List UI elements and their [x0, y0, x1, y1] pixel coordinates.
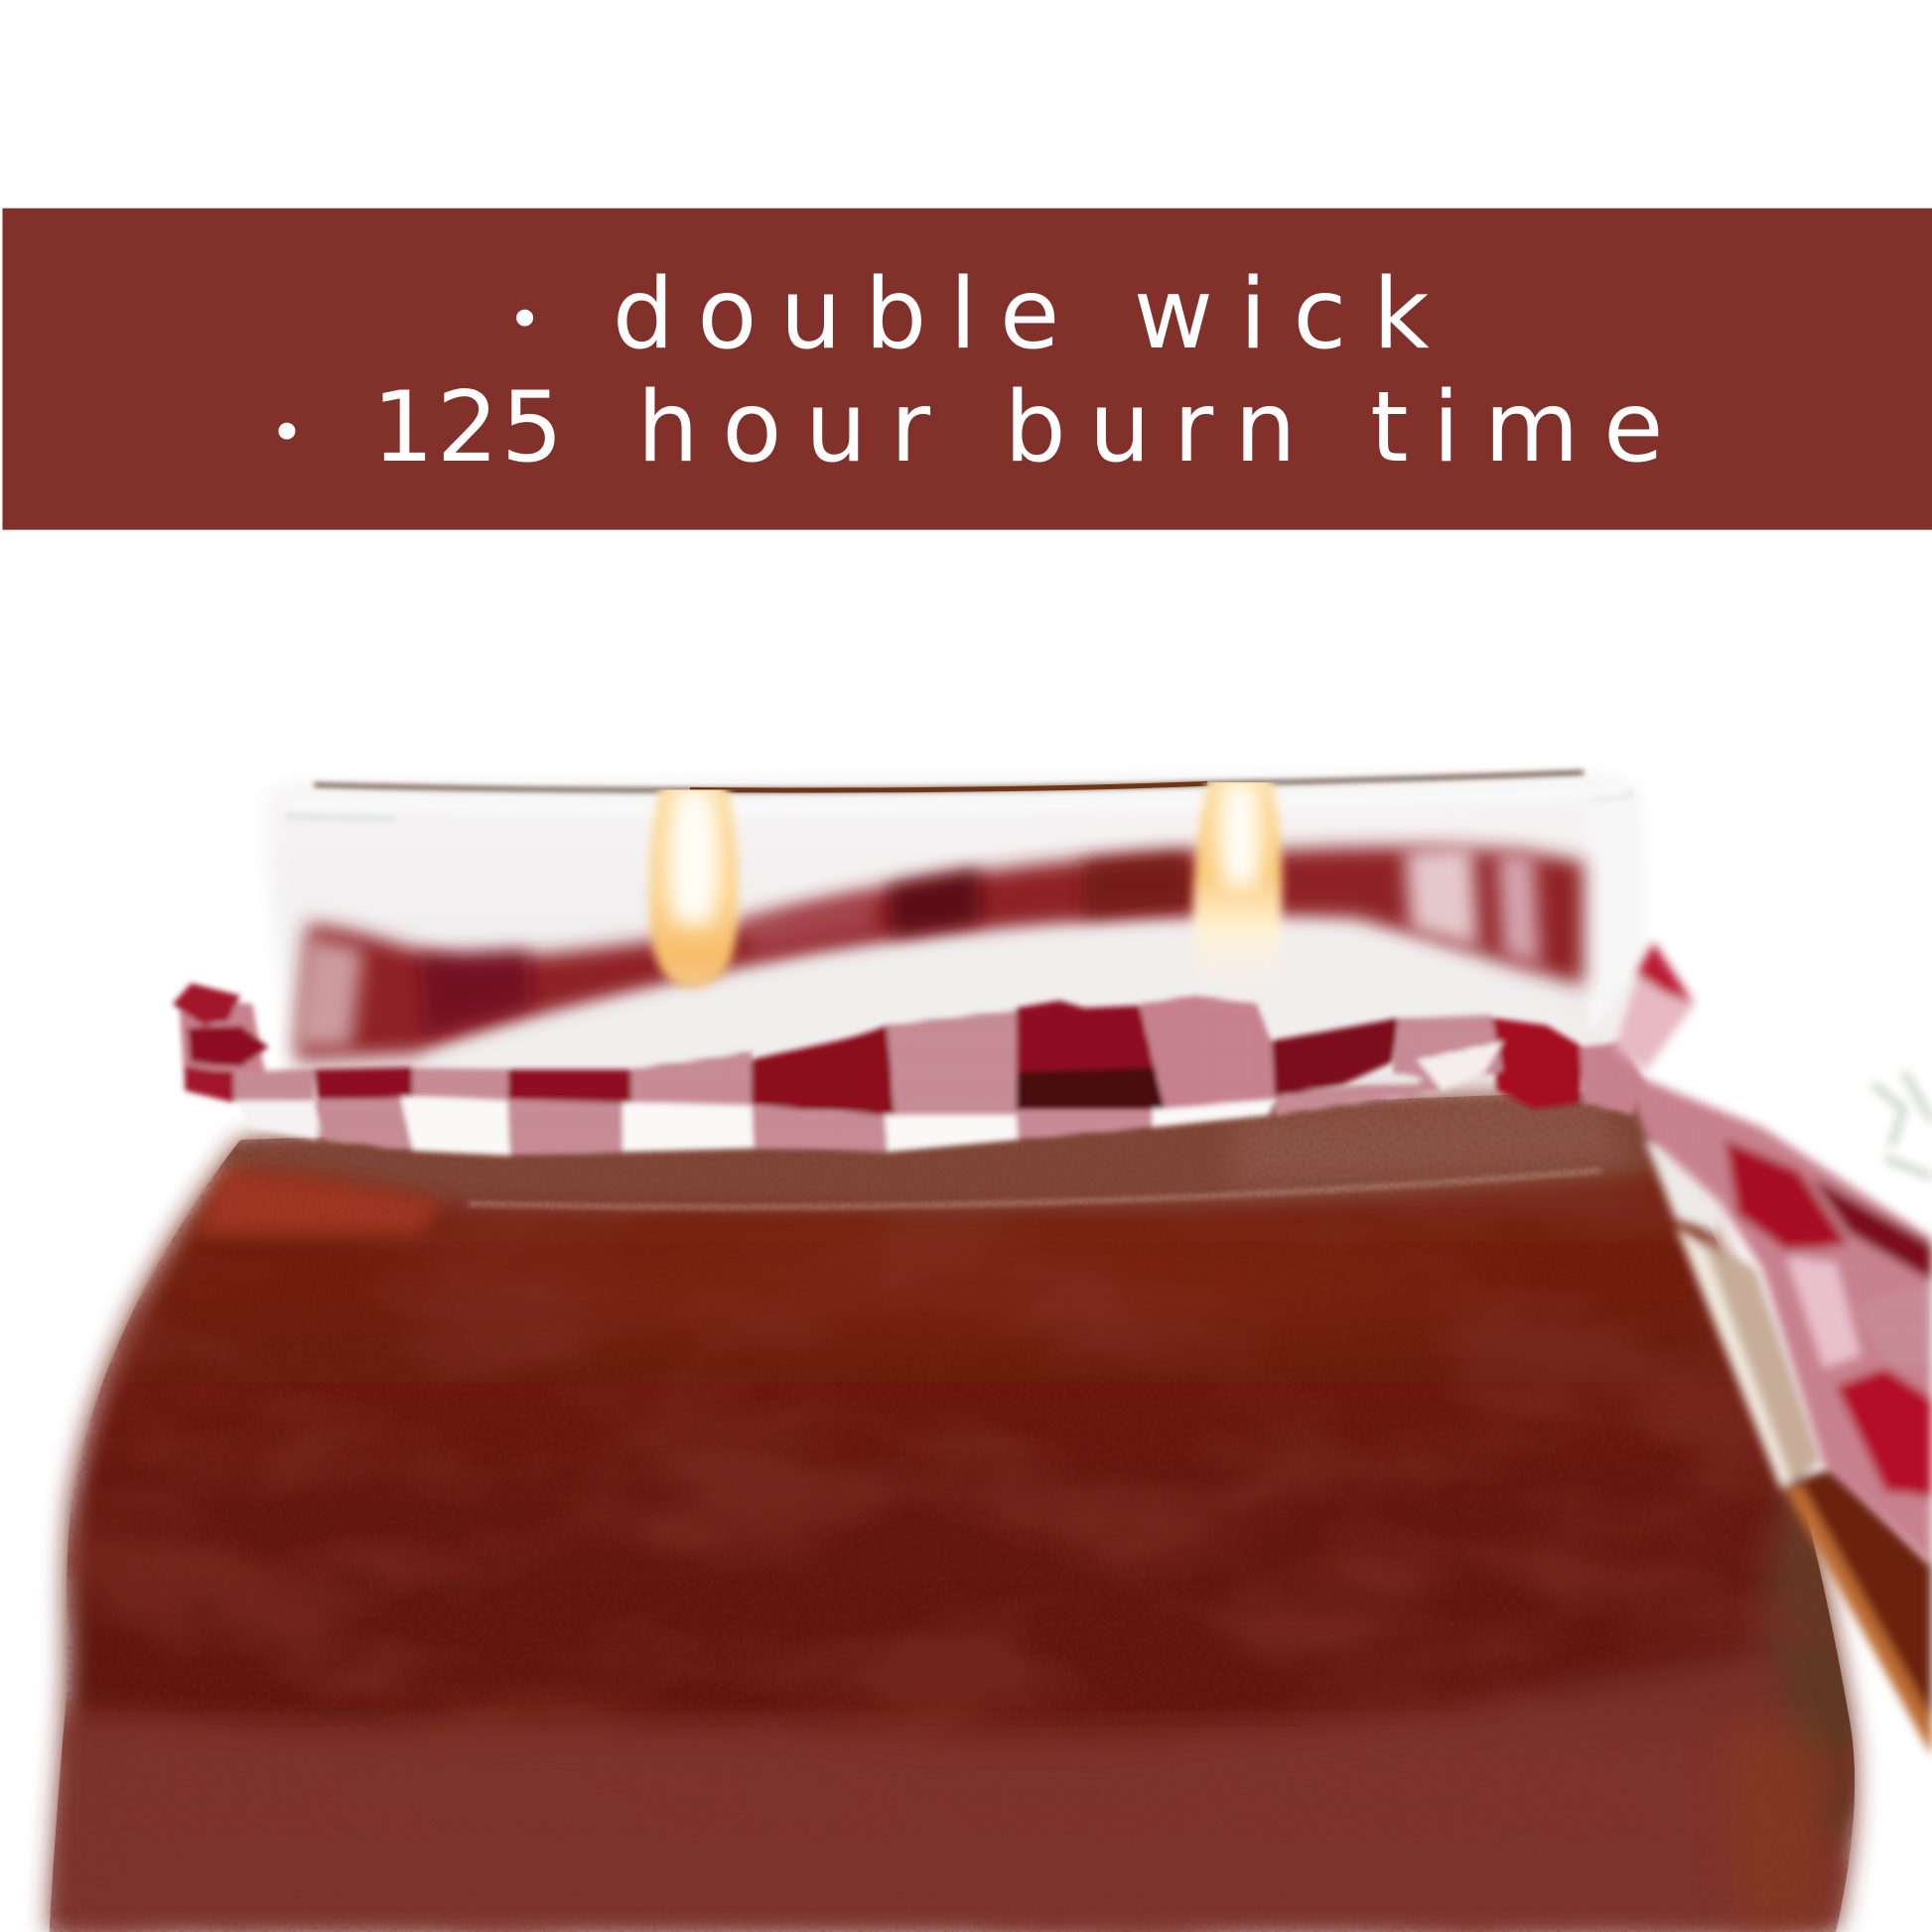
feature: 125 hour burn time: • — [270, 398, 304, 466]
feature: 125 hour burn time: burn — [1004, 371, 1297, 484]
right flame — [1192, 770, 1283, 1004]
paper tag — [1645, 1140, 1932, 1756]
gingham ribbon tied around neck — [173, 983, 1645, 1156]
bottom row white cells — [234, 1097, 1276, 1156]
ribbon tail — [1626, 1072, 1932, 1565]
top row check cells — [234, 996, 1503, 1115]
rim of jar — [283, 772, 1626, 808]
top row red cells — [314, 1001, 1584, 1115]
glass jar neck — [268, 773, 1641, 1109]
left ribbon end — [173, 983, 269, 1103]
feature: 125 hour burn time: 125 — [372, 371, 563, 484]
feature: 125 hour burn time: hour — [637, 371, 931, 484]
wax surface — [419, 926, 1589, 1084]
feature: 125 hour burn time: time — [1370, 371, 1663, 484]
green sprig — [1872, 1072, 1932, 1176]
bottom row check cells — [314, 1072, 1442, 1156]
ribbon reflection through glass — [296, 845, 1584, 1059]
ribbon upper flap — [1614, 942, 1694, 1072]
left flame — [649, 776, 739, 988]
banner — [2, 208, 1932, 530]
jar body with wax — [0, 1084, 1932, 1932]
ribbon knot — [1580, 1041, 1645, 1115]
banner background — [2, 208, 1932, 530]
candle photograph — [0, 770, 1932, 1932]
feature: double wick: wick — [1134, 258, 1430, 371]
feature: double wick: • — [507, 285, 542, 352]
feature: double wick: double — [613, 258, 1059, 371]
